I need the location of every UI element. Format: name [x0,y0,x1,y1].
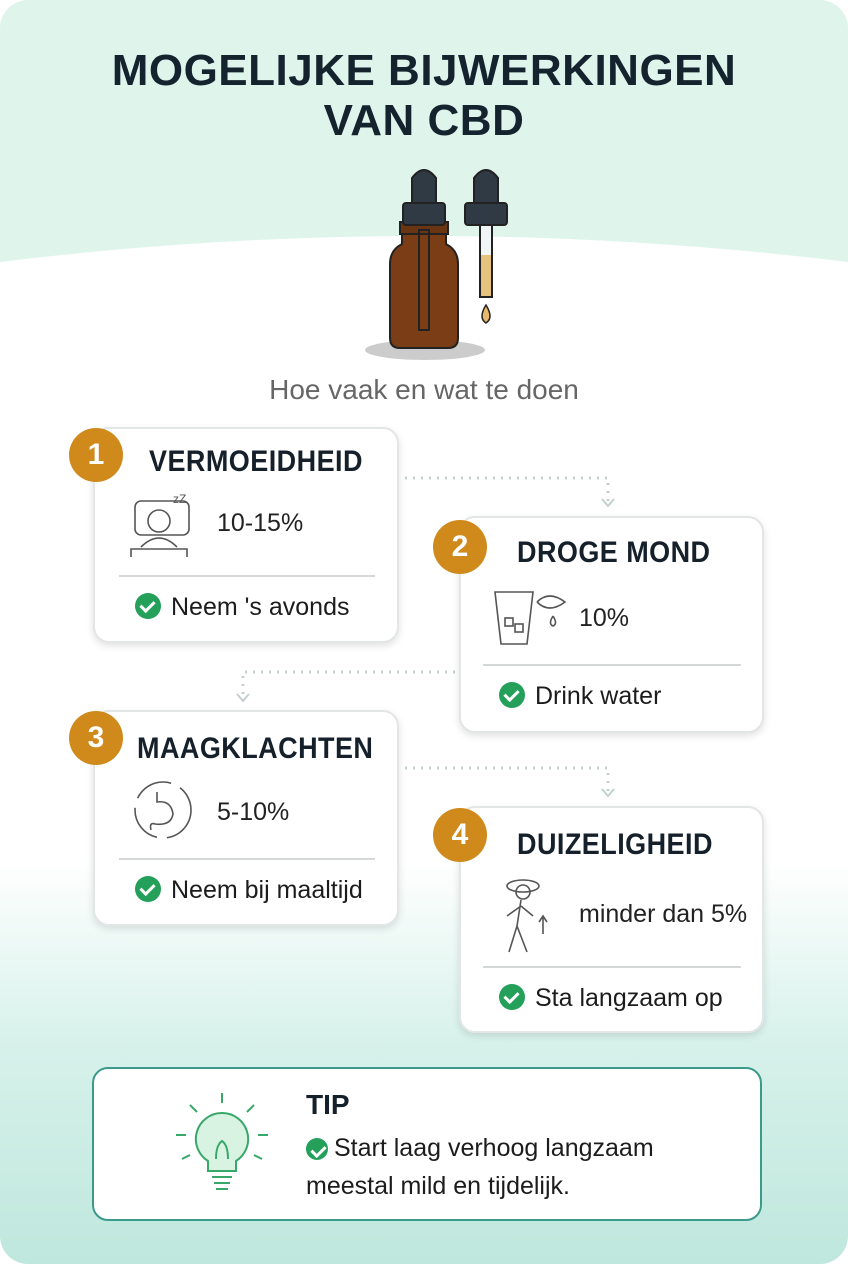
icon: glass and lips [494,591,566,645]
icon: stomach [134,781,192,838]
panel: tip: meestal mild en tijdelijk. [306,1172,570,1200]
icon: light bulb [176,1093,268,1190]
subtitle: Hoe vaak en wat te doen [269,374,579,405]
panel: tip [92,1067,762,1221]
badge 3 [69,711,123,765]
icon: sleeping person [130,492,190,557]
panel: 1 vermoeidheid: Neem 's avonds [171,593,349,621]
panel: tip: TIP [306,1089,350,1120]
badge 2: 2 [452,530,468,563]
panel: 2 droge mond: Drink water [535,682,661,710]
panel: tip: Start laag verhoog langzaam [334,1134,654,1162]
icon: sleeping person: zZ [173,492,186,506]
title: VAN CBD [324,96,524,145]
panel: 4 duizeligheid: Sta langzaam op [535,984,723,1012]
title: MOGELIJKE BIJWERKINGEN [112,46,736,95]
panel: 3 maagklachten [93,710,399,926]
panel: 2 droge mond: 10% [579,604,629,632]
icon: dizzy person [506,879,548,952]
badge 4: 4 [452,818,468,851]
badge 4 [433,808,487,862]
panel: 1 vermoeidheid: 10-15% [217,509,303,537]
panel: 4 duizeligheid: minder dan 5% [579,900,747,928]
panel: 1 vermoeidheid: VERMOEIDHEID [149,445,363,478]
icon: CBD dropper bottle [365,169,508,360]
header background [0,0,848,262]
badge 2 [433,520,487,574]
panel: 3 maagklachten: Neem bij maaltijd [171,876,363,904]
badge 1: 1 [88,438,104,471]
panel: 3 maagklachten: MAAGKLACHTEN [137,732,373,765]
title [112,46,736,145]
panel: 2 droge mond [459,516,764,733]
badge 3: 3 [88,721,104,754]
panel: 4 duizeligheid: DUIZELIGHEID [517,828,713,861]
panel: 4 duizeligheid [459,806,764,1033]
panel: 3 maagklachten: 5-10% [217,798,289,826]
panel: 2 droge mond: DROGE MOND [517,536,710,569]
panel: 1 vermoeidheid [93,427,399,643]
badge 1 [69,428,123,482]
